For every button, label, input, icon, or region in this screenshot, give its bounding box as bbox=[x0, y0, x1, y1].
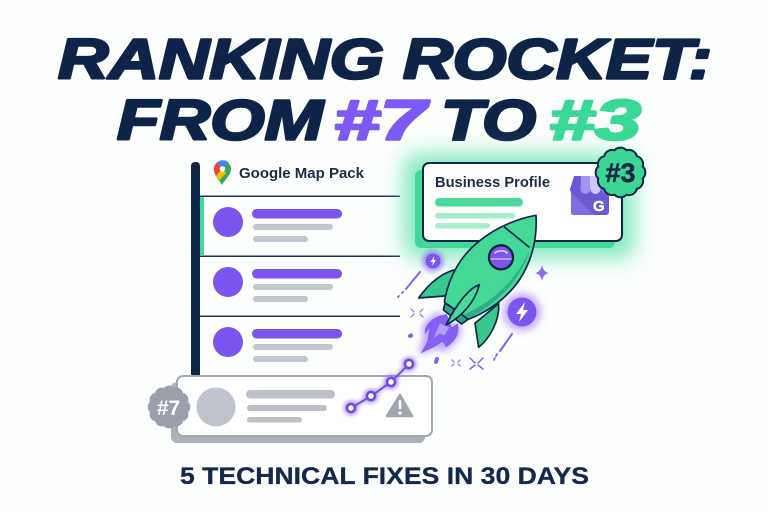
title word: RANKING: RANKING bbox=[58, 28, 384, 90]
icon: business storefront: G bbox=[593, 198, 605, 215]
title bbox=[58, 28, 712, 152]
icon: map pin bbox=[214, 160, 231, 185]
card body bbox=[177, 376, 432, 436]
placeholder lines bbox=[246, 390, 335, 422]
badge: #3: #3 bbox=[605, 158, 636, 188]
icon: warning triangle bbox=[387, 395, 412, 416]
panel: Google Map Pack list bbox=[191, 160, 400, 378]
four point star bbox=[535, 265, 549, 281]
porthole bbox=[489, 245, 513, 269]
badge: #3 bbox=[596, 148, 645, 197]
rocket illustration bbox=[418, 215, 536, 355]
small bolt badge bbox=[422, 250, 444, 272]
card body bbox=[423, 163, 622, 241]
heading: Business Profile: Business Profile bbox=[435, 174, 550, 191]
icon: business storefront bbox=[570, 176, 610, 215]
large bolt badge bbox=[503, 293, 541, 331]
fin left bbox=[419, 269, 458, 298]
title number: #7: #7 bbox=[334, 88, 430, 152]
title word: TO: TO bbox=[441, 88, 536, 152]
engine base bbox=[443, 303, 469, 324]
list spine bbox=[191, 162, 200, 378]
body shading bbox=[464, 249, 530, 318]
sparkles and speed marks bbox=[398, 250, 549, 369]
profile lines bbox=[435, 198, 523, 228]
title number: #3: #3 bbox=[549, 88, 641, 152]
center fin bbox=[446, 285, 479, 325]
panel: business profile card bbox=[404, 148, 645, 258]
title word: FROM: FROM bbox=[117, 88, 325, 152]
footer subtitle: 5 TECHNICAL FIXES IN 30 DAYS bbox=[180, 463, 589, 490]
list row 2 bbox=[213, 267, 342, 302]
list row 1 bbox=[213, 207, 342, 242]
list row 3 bbox=[213, 327, 342, 362]
highlighted row marker bbox=[200, 197, 204, 255]
badge: #7: #7 bbox=[157, 397, 180, 420]
badge: #7 bbox=[148, 386, 190, 428]
nose cone line bbox=[504, 227, 529, 247]
rocket body bbox=[444, 215, 536, 319]
panel: demoted #7 card bbox=[148, 357, 432, 443]
cross sparkles bbox=[411, 309, 483, 369]
speed lines bbox=[398, 272, 512, 362]
avatar placeholder bbox=[196, 388, 236, 426]
fin right bbox=[475, 303, 499, 347]
title word: ROCKET: ROCKET: bbox=[403, 28, 712, 90]
card shadow bbox=[415, 170, 615, 248]
exhaust flame bbox=[418, 312, 461, 355]
heading: Google Map Pack: Google Map Pack bbox=[239, 165, 365, 182]
card glow bbox=[404, 154, 634, 258]
rank path line bbox=[344, 357, 416, 415]
card shadow bbox=[171, 382, 425, 443]
